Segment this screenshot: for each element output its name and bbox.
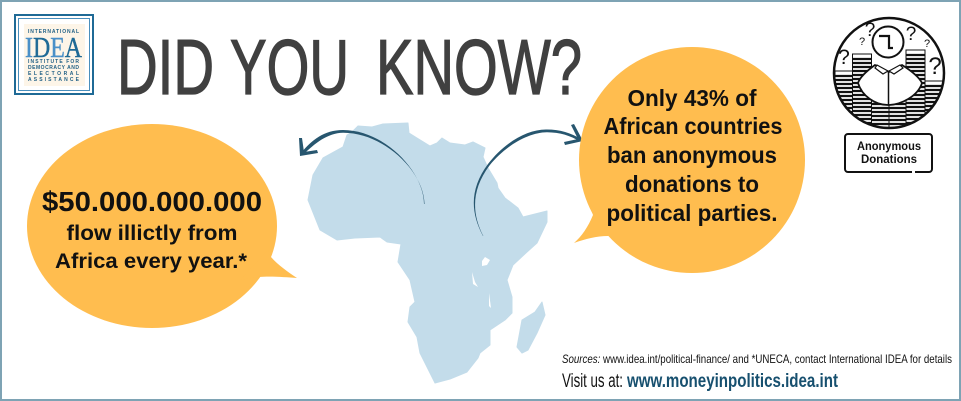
question marks: ?	[906, 24, 916, 45]
right speech bubble	[574, 47, 805, 273]
logo: International IDEA: INSTITUTE FOR	[28, 59, 79, 65]
left arrow	[299, 130, 424, 204]
coin stacks	[835, 50, 943, 132]
icon label: Anonymous Donations: Anonymous	[857, 141, 921, 153]
visit us line: Visit us at:	[562, 371, 623, 392]
logo: International IDEA	[15, 15, 93, 94]
question marks: ?	[865, 20, 875, 41]
question marks: ?	[928, 53, 942, 80]
head	[872, 26, 904, 58]
right bubble text: Only 43% of	[628, 85, 757, 111]
left bubble text: $50.000.000.000	[42, 186, 262, 217]
left bubble text	[42, 186, 262, 273]
logo: International IDEA: INTERNATIONAL	[28, 29, 79, 35]
torso	[858, 65, 922, 105]
title: DID	[117, 23, 214, 111]
question marks: ?	[859, 36, 865, 48]
question marks: ?	[924, 38, 930, 50]
map of Africa	[308, 123, 547, 383]
right bubble text: donations to	[625, 171, 759, 197]
left bubble text: Africa every year.*	[55, 250, 248, 273]
right arrow	[474, 124, 583, 236]
title: YOU	[230, 23, 349, 111]
right bubble text: political parties.	[606, 200, 778, 226]
icon label: Anonymous Donations: Donations	[861, 154, 917, 166]
visit us line	[562, 371, 839, 392]
right bubble text: African countries	[604, 113, 782, 139]
visit us line: www.moneyinpolitics.idea.int	[626, 371, 839, 392]
left bubble text: flow illictly from	[66, 222, 237, 245]
logo: International IDEA: ASSISTANCE	[28, 77, 80, 83]
right bubble text: ban anonymous	[607, 142, 777, 168]
title	[117, 23, 582, 111]
right bubble text	[604, 85, 782, 226]
question marks: ?	[838, 46, 850, 69]
question marks	[838, 20, 942, 80]
icon label: Anonymous Donations	[845, 134, 932, 174]
logo: International IDEA: DEMOCRACY AND	[28, 65, 79, 71]
logo: International IDEA: IDEA	[25, 32, 82, 64]
logo: International IDEA: ELECTORAL	[28, 71, 79, 77]
icon: anonymous donor with coins	[834, 18, 944, 132]
left speech bubble	[27, 124, 297, 328]
title: KNOW?	[376, 23, 582, 111]
